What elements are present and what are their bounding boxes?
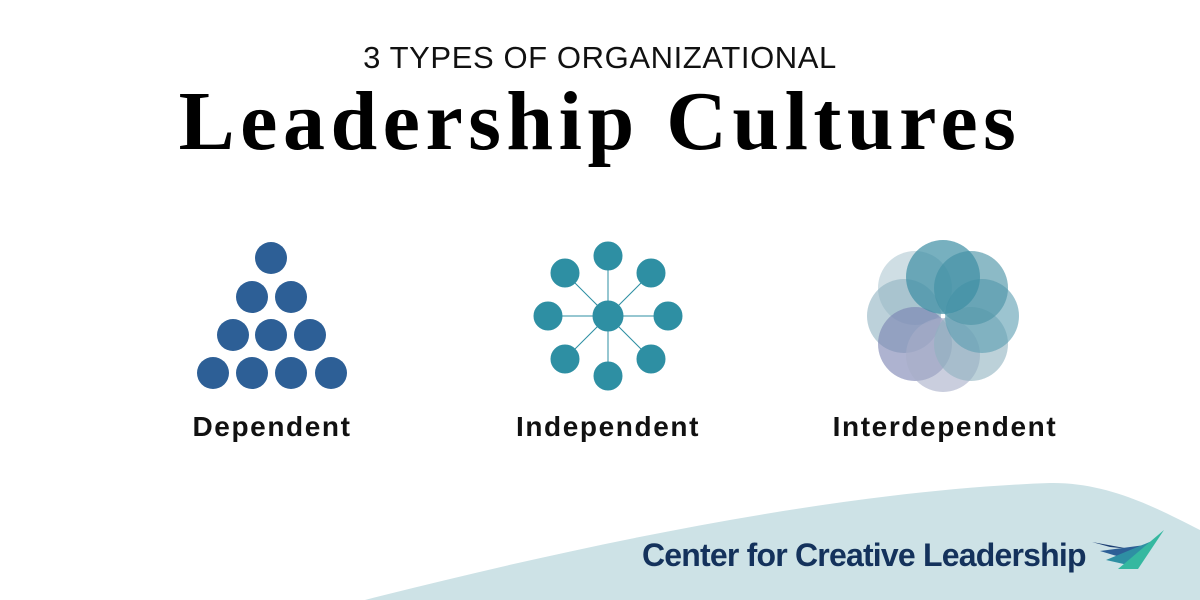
logo bbox=[642, 530, 1164, 573]
label: dependent: Dependent bbox=[192, 411, 352, 442]
logo mark bbox=[1092, 530, 1164, 569]
icon: interdependent flower bbox=[867, 240, 1019, 392]
label: interdependent: Interdependent bbox=[833, 411, 1057, 442]
icon: dependent pyramid bbox=[197, 242, 347, 389]
subtitle: 3 TYPES OF ORGANIZATIONAL bbox=[363, 40, 837, 75]
title: Leadership Cultures bbox=[179, 75, 1021, 168]
label: independent: Independent bbox=[516, 411, 700, 442]
logo text: Center for Creative Leadership bbox=[642, 537, 1086, 573]
icon: independent network bbox=[534, 242, 682, 390]
